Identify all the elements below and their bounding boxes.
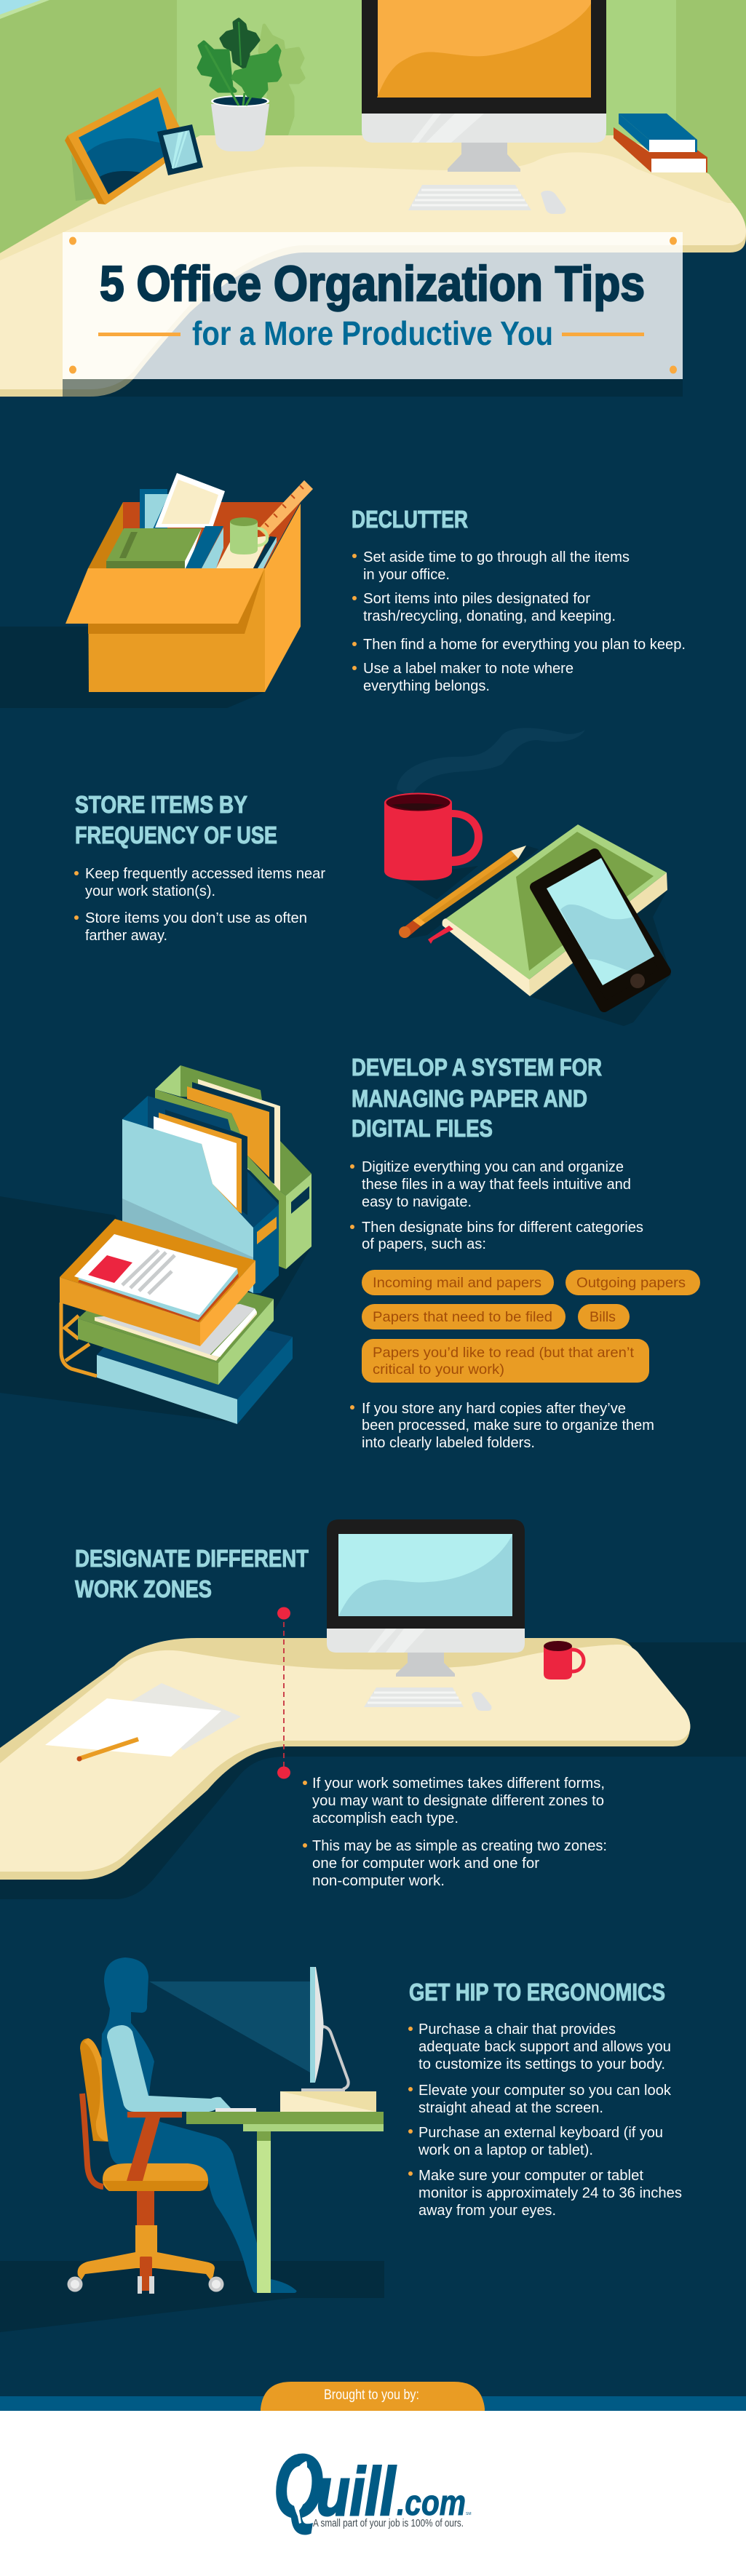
pills: paper categories: Outgoing papers <box>576 1275 686 1291</box>
bullet list: digitize and designate: easy to navigate. <box>362 1194 472 1210</box>
illustration: phone <box>535 854 666 1007</box>
bullet list: ergonomics: Make sure your computer or tablet <box>418 2168 643 2184</box>
bullet list: ergonomics: monitor is approximately 24 to 36 inches <box>418 2185 682 2201</box>
Quill.com logo: uill <box>317 2454 397 2529</box>
illustration: box of office items <box>0 473 313 708</box>
bullet list: declutter <box>352 549 686 694</box>
floor shadow <box>0 2261 384 2332</box>
heading: work zones <box>75 1546 309 1603</box>
heading: ergonomics: GET HIP TO ERGONOMICS <box>409 1979 665 2006</box>
plant shadow on wall <box>260 25 303 143</box>
pills: paper categories: Bills <box>590 1309 616 1325</box>
monitor <box>362 0 606 172</box>
dashed divider with pins <box>277 1607 290 1778</box>
middle green tray <box>78 1292 274 1385</box>
picture frame <box>65 87 180 204</box>
Quill.com logo: Q <box>274 2436 323 2535</box>
riser <box>280 2091 376 2112</box>
bullet list: ergonomics: adequate back support and allows you <box>418 2039 671 2055</box>
brought to you by tab <box>261 2382 485 2411</box>
monitor <box>327 1519 525 1677</box>
heading: store items <box>75 792 277 849</box>
bullet list: ergonomics <box>408 2022 682 2219</box>
heading: paper and digital files: DEVELOP A SYSTEM FOR <box>352 1054 602 1081</box>
red mug <box>544 1641 584 1679</box>
bullet list: declutter: Then find a home for everything you plan to keep. <box>363 637 686 653</box>
L-shaped desk <box>0 1638 690 1880</box>
footer <box>0 2382 746 2576</box>
illustration: file holders and trays <box>0 1065 312 1424</box>
heading: paper and digital files: MANAGING PAPER AND <box>352 1086 587 1113</box>
heading: paper and digital files: DIGITAL FILES <box>352 1116 493 1142</box>
bullet list: ergonomics: to customize its settings to your body. <box>418 2056 665 2072</box>
bullet list: work zones: you may want to designate different zones to <box>312 1793 604 1809</box>
pills: paper categories: Papers that need to be filed <box>373 1309 552 1325</box>
bullet: hard copies: into clearly labeled folders. <box>362 1435 535 1451</box>
bullet list: work zones: This may be as simple as creating two zones: <box>312 1838 607 1854</box>
heading: paper and digital files <box>352 1054 602 1142</box>
bullet list: digitize and designate: these files in a way that feels intuitive and <box>362 1177 631 1193</box>
top orange tray <box>60 1219 255 1346</box>
brought to you by tab: Brought to you by: <box>324 2388 419 2403</box>
heading: store items: STORE ITEMS BY <box>75 792 247 819</box>
bullet: hard copies <box>350 1401 654 1451</box>
mouse <box>472 1692 491 1711</box>
green file holder <box>155 1065 312 1269</box>
illustration: red mug <box>384 793 483 899</box>
bullet list: store items <box>74 866 325 944</box>
pills: paper categories: critical to your work) <box>373 1361 504 1378</box>
heading: declutter: DECLUTTER <box>352 506 468 533</box>
illustration: steam <box>397 728 585 797</box>
desk <box>0 135 746 397</box>
pills: paper categories: Incoming mail and papers <box>373 1275 541 1291</box>
illustration: notebook <box>400 824 671 1026</box>
section: develop a system for managing paper and digital files <box>0 1054 700 1451</box>
desk side view <box>186 2112 384 2293</box>
desk shadow <box>0 1642 746 1899</box>
Quill.com logo: SM <box>466 2512 472 2516</box>
wall <box>0 0 746 262</box>
illustration: person at desk <box>67 1957 384 2294</box>
bullet list: digitize and designate <box>350 1159 643 1252</box>
keyboard side view <box>215 2108 256 2112</box>
bullet: hard copies: been processed, make sure to organize them <box>362 1418 654 1434</box>
heading: store items: FREQUENCY OF USE <box>75 822 277 849</box>
section: declutter <box>0 473 686 708</box>
person <box>101 1957 297 2293</box>
mouse <box>541 191 566 214</box>
potted plant <box>199 20 280 151</box>
pills: paper categories <box>362 1270 700 1383</box>
bullet list: digitize and designate: Digitize everything you can and organize <box>362 1159 624 1175</box>
bullet list: declutter: Set aside time to go through all the items <box>363 549 630 565</box>
bullet list: ergonomics: straight ahead at the screen. <box>418 2100 603 2116</box>
bullet list: work zones: one for computer work and one for <box>312 1856 539 1872</box>
Quill.com logo: .com <box>397 2484 466 2523</box>
papers and pencil <box>45 1683 241 1761</box>
bullet list: ergonomics: work on a laptop or tablet). <box>418 2142 593 2158</box>
monitor side view <box>301 1967 349 2092</box>
keyboard <box>408 185 531 210</box>
bullet list: declutter: Use a label maker to note where <box>363 661 574 677</box>
bullet list: ergonomics: Elevate your computer so you can look <box>418 2083 672 2099</box>
bullet list: work zones: accomplish each type. <box>312 1810 459 1826</box>
title card <box>63 232 683 397</box>
bottom box <box>97 1329 293 1424</box>
stack of books <box>614 114 707 172</box>
header scene: office wall and desk <box>0 0 746 397</box>
bullet list: store items: Keep frequently accessed items near <box>85 866 325 882</box>
bullet list: declutter: trash/recycling, donating, and keeping. <box>363 608 616 624</box>
section: get hip to ergonomics <box>0 1957 682 2332</box>
chair seat and base <box>67 2112 224 2294</box>
bullet list: digitize and designate: of papers, such as: <box>362 1236 486 1252</box>
Quill.com logo: A small part of your job is 100% of ours. <box>313 2517 464 2529</box>
bullet list: digitize and designate: Then designate bins for different categories <box>362 1220 643 1236</box>
bullet list: declutter: everything belongs. <box>363 678 490 694</box>
bullet list: ergonomics: Purchase an external keyboard (if you <box>418 2125 663 2141</box>
section: designate different work zones <box>0 1519 746 1899</box>
small photo frame <box>157 124 203 175</box>
blue magazine file <box>122 1096 279 1293</box>
bullet list: store items: your work station(s). <box>85 883 215 899</box>
bullet list: store items: Store items you don’t use as often <box>85 910 307 926</box>
pills: paper categories: Papers you’d like to read (but that aren’t <box>373 1345 635 1361</box>
heading: work zones: WORK ZONES <box>75 1576 212 1603</box>
chair back <box>80 2038 111 2187</box>
bullet list: work zones: If your work sometimes takes different forms, <box>312 1776 605 1792</box>
illustration: pencil <box>399 846 526 938</box>
Quill.com logo <box>274 2436 472 2535</box>
bullet list: declutter: in your office. <box>363 567 450 583</box>
bullet list: work zones: non-computer work. <box>312 1873 445 1889</box>
bullet list: declutter: Sort items into piles designated for <box>363 591 590 607</box>
bullet: hard copies: If you store any hard copies after they’ve <box>362 1401 626 1417</box>
bullet list: work zones <box>303 1776 607 1889</box>
bullet list: store items: farther away. <box>85 928 167 944</box>
bullet list: ergonomics: Purchase a chair that provides <box>418 2022 616 2038</box>
bullet list: ergonomics: away from your eyes. <box>418 2203 556 2219</box>
keyboard <box>364 1687 464 1707</box>
section: store items by frequency of use <box>74 728 671 1026</box>
wire tray frame <box>61 1303 97 1376</box>
heading: work zones: DESIGNATE DIFFERENT <box>75 1546 309 1573</box>
line of sight <box>149 1981 310 2072</box>
title: 5 Office Organization Tips <box>100 256 645 311</box>
subtitle with rules: for a More Productive You <box>192 314 553 352</box>
arm <box>107 2025 231 2112</box>
